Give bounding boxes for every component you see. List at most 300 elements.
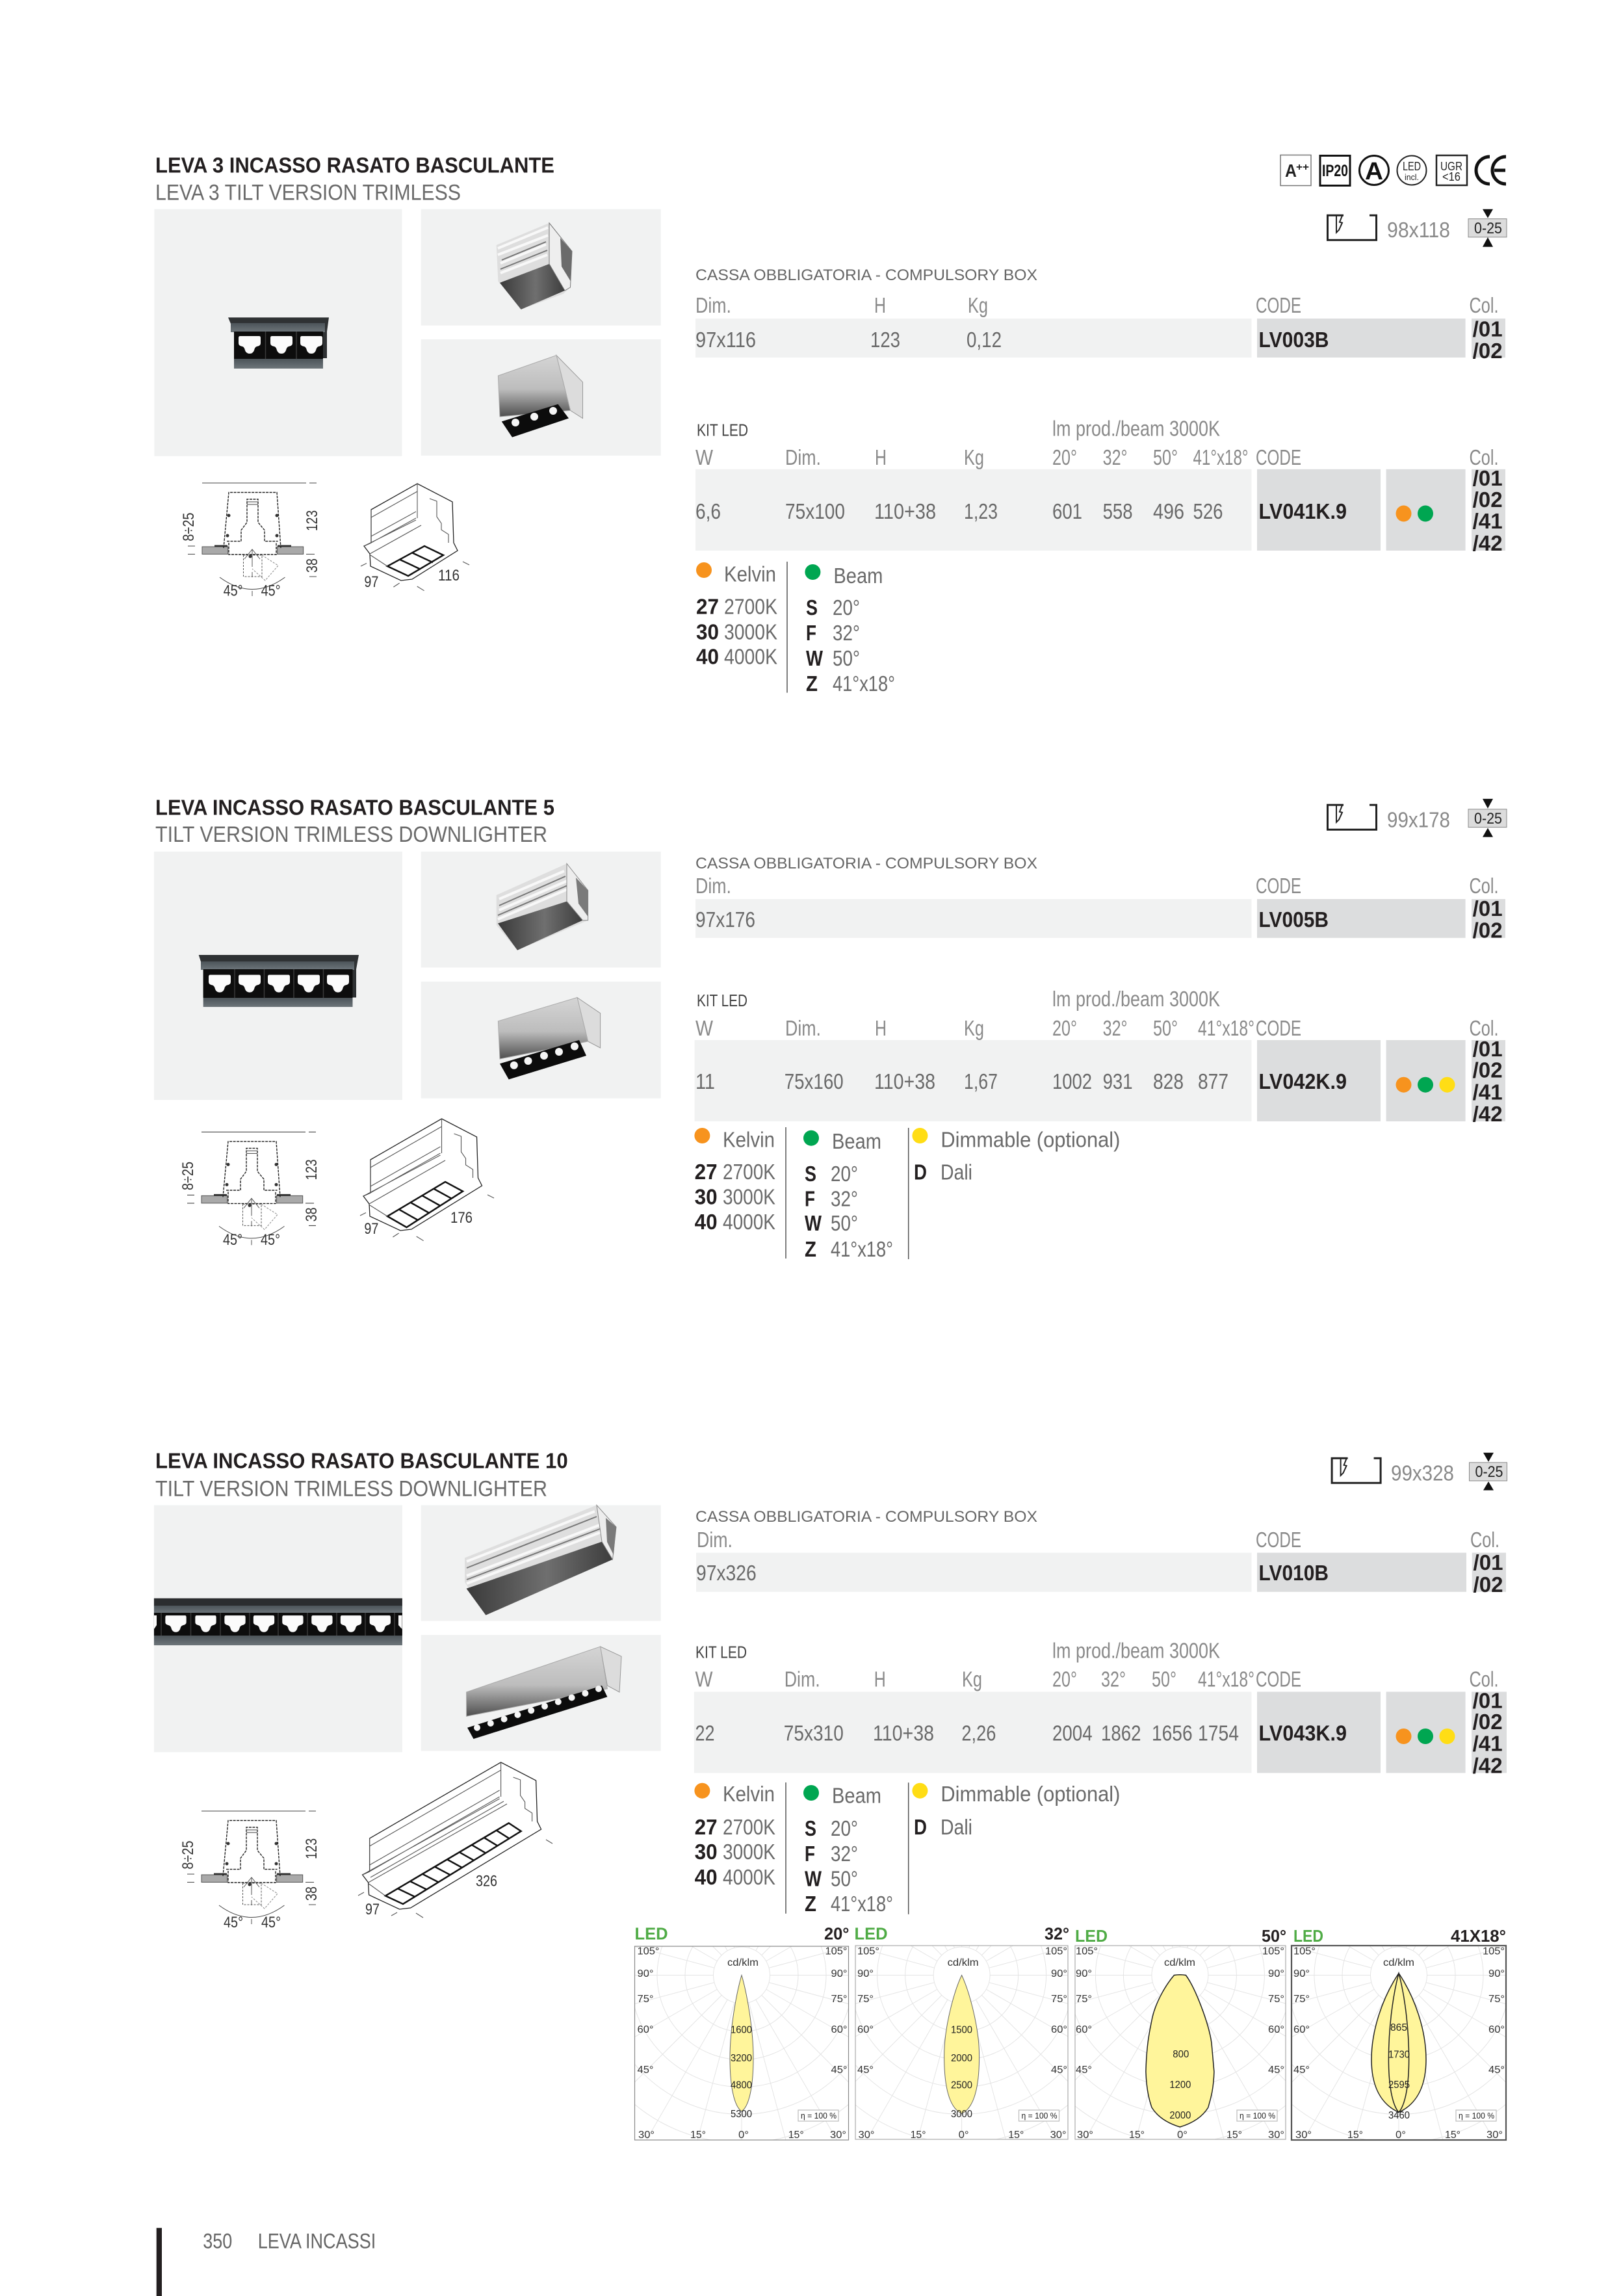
table: compulsory box: 97x176: [695, 907, 755, 932]
polar chart: LED 32°: 60°: [1051, 2024, 1067, 2035]
polar chart: LED 32°: 0°: [959, 2130, 969, 2141]
section drawing: [188, 483, 317, 596]
polar chart: LED 20°: 60°: [831, 2024, 848, 2035]
isometric drawing: [358, 1762, 552, 1918]
polar chart: LED 50°: 105°: [1262, 1946, 1284, 1957]
panel: bottom render: [421, 1635, 661, 1751]
polar chart: LED 32°: 60°: [857, 2024, 874, 2035]
polar chart: LED 32°: 75°: [857, 1994, 874, 2005]
table: compulsory box: Col.: [1469, 874, 1499, 898]
cut-out size: [1332, 1458, 1454, 1485]
table: kit LED: 110+38: [874, 1069, 935, 1093]
table: compulsory box: Col.: [1469, 293, 1499, 317]
polar chart: LED 32°: 32°: [1045, 1924, 1069, 1943]
footer: [157, 2228, 376, 2296]
legend: kelvin, beam, dimmable: Kelvin: [723, 1782, 775, 1806]
polar chart: LED 32°: 2500: [951, 2080, 972, 2091]
polar chart: LED 50°: 15°: [1129, 2130, 1145, 2141]
panel: top render: [421, 209, 661, 326]
polar chart: LED 32°: 15°: [911, 2130, 926, 2141]
table: kit LED: LV043K.9: [1258, 1721, 1347, 1745]
table: kit LED: 601: [1052, 499, 1082, 523]
polar chart: LED 32°: 75°: [1051, 1994, 1067, 2005]
polar chart: LED 20°: 30°: [830, 2130, 846, 2141]
table: kit LED: 50°: [1152, 1667, 1176, 1691]
polar chart: LED 20°: 90°: [637, 1968, 653, 1979]
table: kit LED: LV042K.9: [1258, 1069, 1347, 1093]
section dimensions: 8÷25: [180, 513, 198, 541]
legend: kelvin, beam, dimmable: 2700K: [723, 1815, 775, 1839]
isometric drawing: 97: [365, 1901, 380, 1918]
table: kit LED: 20°: [1052, 1667, 1077, 1691]
table: kit LED: 2004: [1052, 1721, 1093, 1745]
ceiling thickness 0-25: [1468, 799, 1507, 837]
legend: kelvin, beam, dimmable: 30: [695, 1185, 718, 1209]
table: kit LED: 1862: [1101, 1721, 1141, 1745]
section dimensions: [179, 1838, 320, 1931]
section dimensions: 8÷25: [179, 1841, 197, 1870]
cut-out size: 99x178: [1387, 808, 1450, 832]
legend: kelvin, beam, dimmable: 50°: [831, 1867, 858, 1890]
table: kit LED: /42: [1473, 1102, 1503, 1126]
polar chart: LED 41X18°: 15°: [1445, 2130, 1461, 2141]
legend: kelvin, beam, dimmable: 40: [695, 1210, 718, 1234]
panel: front view photo: [154, 209, 402, 456]
polar chart: LED 41X18°: 865: [1390, 2022, 1407, 2033]
table: compulsory box: H: [874, 293, 886, 317]
polar chart: LED 50°: 45°: [1076, 2065, 1092, 2076]
table: kit LED: 828: [1153, 1069, 1184, 1093]
legend: kelvin, beam, dimmable: F: [805, 1187, 815, 1211]
table: kit LED: lm prod./beam 3000K: [1052, 1639, 1220, 1663]
legend: kelvin, beam, dimmable: 50°: [831, 1211, 858, 1235]
cut-out size: 99x328: [1391, 1461, 1454, 1485]
isometric drawing: [360, 1119, 494, 1241]
table: compulsory box: 0,12: [967, 328, 1002, 352]
polar chart: LED 32°: 1500: [951, 2025, 972, 2036]
table: kit LED: Kg: [964, 445, 984, 469]
legend: kelvin, beam, dimmable: W: [805, 1867, 822, 1890]
legend: kelvin and beam: 20°: [833, 595, 860, 620]
polar chart: LED 32°: LED: [854, 1924, 888, 1943]
polar chart: LED 50°: 90°: [1076, 1968, 1092, 1979]
table: kit LED: H: [874, 1667, 886, 1691]
table: compulsory box: CASSA OBBLIGATORIA - COMPULSORY BOX: [695, 855, 1037, 872]
polar chart: LED 20°: 20°: [824, 1924, 849, 1943]
isometric drawing: 97: [364, 1220, 378, 1238]
icon: LED incl.: LED: [1403, 160, 1421, 173]
section 2: LEVA 5: [154, 795, 1507, 1261]
table: kit LED: /01: [1473, 1037, 1503, 1061]
polar chart: LED 41X18°: 90°: [1488, 1968, 1505, 1979]
polar chart: LED 20°: LED: [634, 1924, 668, 1943]
table: kit LED: [694, 1639, 1507, 1777]
section 3: LEVA 10: [154, 1449, 1507, 1931]
table: kit LED: 41°x18°: [1198, 1016, 1254, 1040]
polar chart: LED 20°: 1600: [731, 2025, 752, 2036]
polar chart: LED 20°: 5300: [731, 2109, 752, 2120]
table: kit LED: /02: [1473, 1710, 1503, 1734]
isometric drawing: 116: [438, 567, 460, 584]
legend: kelvin and beam: 50°: [833, 646, 860, 670]
polar chart: LED 20°: 4800: [731, 2080, 752, 2091]
table: compulsory box: 123: [870, 328, 900, 352]
title: LEVA INCASSO RASATO BASCULANTE 5: [155, 795, 554, 819]
polar chart: LED 32°: 30°: [1050, 2130, 1067, 2141]
table: kit LED: 75x100: [785, 499, 845, 523]
legend: kelvin, beam, dimmable: Dimmable (optional): [941, 1128, 1120, 1152]
polar chart: LED 50°: 1200: [1169, 2080, 1191, 2091]
section dimensions: 45°: [261, 1914, 281, 1931]
section drawing: [187, 1132, 316, 1245]
polar chart: LED 50°: 30°: [1268, 2130, 1284, 2141]
section 1: LEVA 3: [154, 153, 1507, 696]
section dimensions: 45°: [261, 1231, 280, 1249]
legend: kelvin, beam, dimmable: Dimmable (optional): [941, 1782, 1120, 1806]
table: kit LED: LV041K.9: [1258, 499, 1347, 523]
table: kit LED: /02: [1473, 1058, 1503, 1082]
table: kit LED: /41: [1473, 509, 1503, 533]
table: kit LED: 50°: [1153, 445, 1178, 469]
table: kit LED: 6,6: [695, 499, 721, 523]
table: kit LED: 41°x18°: [1193, 445, 1248, 469]
isometric drawing: 97: [364, 573, 378, 591]
legend: kelvin, beam, dimmable: Z: [805, 1237, 816, 1261]
page marker bar: [157, 2228, 162, 2296]
legend: kelvin and beam: 30: [696, 620, 719, 644]
polar chart: LED 50°: 90°: [1268, 1968, 1284, 1979]
table: kit LED: /02: [1473, 488, 1503, 512]
polar chart: LED 32°: 15°: [1008, 2130, 1024, 2141]
ceiling thickness 0-25: 0-25: [1475, 1463, 1503, 1481]
table: compulsory box: /02: [1473, 918, 1503, 942]
legend: kelvin, beam, dimmable: S: [805, 1816, 816, 1840]
polar chart: LED 32°: 30°: [858, 2130, 874, 2141]
polar chart: LED 41X18°: 60°: [1488, 2024, 1505, 2035]
table: compulsory box: /01: [1473, 317, 1503, 341]
cut-out size: [1327, 805, 1450, 832]
polar chart: LED 41X18°: 41X18°: [1451, 1926, 1506, 1946]
subtitle: TILT VERSION TRIMLESS DOWNLIGHTER: [155, 1477, 547, 1502]
table: kit LED: 20°: [1052, 1016, 1077, 1040]
table: compulsory box: /01: [1473, 896, 1503, 920]
table: kit LED: 931: [1103, 1069, 1133, 1093]
section name: LEVA INCASSI: [258, 2229, 376, 2252]
polar chart: LED 50°: LED: [1075, 1926, 1108, 1946]
polar chart: LED 20°: η = 100 %: [801, 2111, 837, 2120]
polar chart: LED 20°: 3200: [731, 2053, 752, 2064]
legend: kelvin and beam: 32°: [833, 621, 860, 645]
table: kit LED: W: [695, 1667, 713, 1691]
polar chart: LED 32°: η = 100 %: [1022, 2111, 1057, 2120]
table: kit LED: Dim.: [785, 1016, 821, 1040]
polar chart: LED 41X18°: 105°: [1483, 1946, 1505, 1957]
table: kit LED: 32°: [1103, 1016, 1128, 1040]
legend: kelvin, beam, dimmable: Beam: [832, 1129, 881, 1153]
table: kit LED: W: [695, 1016, 714, 1040]
section dimensions: 45°: [224, 582, 243, 599]
polar chart: LED 50°: 30°: [1077, 2130, 1093, 2141]
legend: kelvin, beam, dimmable: 20°: [831, 1162, 858, 1186]
polar chart: LED 20°: 105°: [637, 1946, 659, 1957]
legend: kelvin, beam, dimmable: W: [805, 1211, 822, 1235]
section dimensions: [179, 1159, 320, 1249]
legend: kelvin and beam: S: [806, 595, 818, 620]
polar chart: LED 41X18°: [1139, 1715, 1623, 2235]
section dimensions: 38: [303, 1886, 320, 1901]
table: kit LED: 50°: [1153, 1016, 1178, 1040]
polar chart: LED 20°: 60°: [637, 2024, 653, 2035]
polar chart: LED 41X18°: 105°: [1293, 1946, 1316, 1957]
isometric drawing: [361, 484, 469, 591]
polar chart: LED 41X18°: 30°: [1295, 2130, 1312, 2141]
table: kit LED: 75x160: [785, 1069, 844, 1093]
polar chart: LED 41X18°: cd/klm: [1383, 1957, 1414, 1968]
polar chart: LED 32°: 2000: [951, 2053, 972, 2064]
table: kit LED: CODE: [1256, 1667, 1301, 1691]
polar chart: LED 41X18°: 75°: [1293, 1994, 1310, 2005]
table: compulsory box: /02: [1473, 339, 1503, 363]
polar chart: LED 50°: 75°: [1268, 1994, 1284, 2005]
table: kit LED: Kg: [962, 1667, 982, 1691]
subtitle: LEVA 3 TILT VERSION TRIMLESS: [155, 181, 461, 205]
polar chart: LED 41X18°: LED: [1293, 1926, 1323, 1946]
polar chart: LED 50°: 45°: [1268, 2065, 1284, 2076]
polar chart: LED 50°: 2000: [1169, 2110, 1191, 2121]
legend: kelvin, beam, dimmable: Z: [805, 1892, 816, 1916]
polar chart: LED 50°: 60°: [1076, 2024, 1092, 2035]
icon: energy class A++: ++: [1296, 162, 1309, 173]
polar chart: LED 50°: 800: [1173, 2049, 1189, 2060]
table: kit LED: Col.: [1469, 1016, 1499, 1040]
table: compulsory box: Col.: [1470, 1528, 1500, 1552]
panel: top render: [421, 852, 661, 967]
legend: kelvin, beam, dimmable: 4000K: [723, 1210, 775, 1234]
table: compulsory box: [695, 855, 1505, 942]
legend: kelvin and beam: Kelvin: [724, 562, 776, 586]
polar chart: LED 50°: 0°: [1177, 2130, 1188, 2141]
polar chart: LED 41X18°: 90°: [1293, 1968, 1310, 1979]
legend: kelvin, beam, dimmable: 4000K: [723, 1865, 775, 1889]
polar chart: LED 41X18°: 15°: [1347, 2130, 1363, 2141]
icon: IP20: [1320, 156, 1350, 186]
table: kit LED: 877: [1198, 1069, 1228, 1093]
table: kit LED: Dim.: [785, 445, 821, 469]
legend: kelvin, beam, dimmable: 3000K: [723, 1185, 775, 1209]
table: compulsory box: CASSA OBBLIGATORIA - COMPULSORY BOX: [695, 1508, 1037, 1526]
polar chart: LED 41X18°: 0°: [1396, 2130, 1406, 2141]
polar chart: LED 32°: 90°: [1051, 1968, 1067, 1979]
panel: top render: [421, 1505, 661, 1621]
section dimensions: [180, 510, 321, 599]
icon: CE mark: [1476, 157, 1506, 184]
legend: kelvin, beam, dimmable: 32°: [831, 1842, 858, 1866]
table: compulsory box: [695, 267, 1505, 363]
icon: UGR<16: <16: [1442, 170, 1461, 183]
title: LEVA 3 INCASSO RASATO BASCULANTE: [155, 153, 554, 177]
polar chart: LED 50°: 75°: [1076, 1994, 1092, 2005]
table: kit LED: CODE: [1256, 1016, 1301, 1040]
panel: front view photo: [154, 852, 402, 1100]
polar chart: LED 32°: 45°: [1051, 2065, 1067, 2076]
legend: kelvin, beam, dimmable: 41°x18°: [831, 1892, 893, 1916]
polar chart: LED 41X18°: 3460: [1388, 2110, 1410, 2121]
polar chart: LED 41X18°: 60°: [1293, 2024, 1310, 2035]
polar chart: LED 20°: 45°: [637, 2065, 653, 2076]
legend: kelvin, beam, dimmable: F: [805, 1842, 815, 1866]
legend: kelvin and beam: F: [806, 621, 816, 645]
cut-out size: [1327, 215, 1450, 242]
legend: kelvin, beam, dimmable: 30: [695, 1840, 718, 1864]
polar chart: LED 32°: 45°: [857, 2065, 874, 2076]
table: kit LED: KIT LED: [695, 1643, 747, 1662]
table: compulsory box: [695, 1508, 1506, 1597]
table: kit LED: [695, 987, 1505, 1126]
icon: energy class A++: [1280, 155, 1311, 186]
legend: kelvin and beam: 4000K: [724, 645, 777, 668]
section dimensions: 123: [303, 1159, 320, 1180]
legend: kelvin, beam, dimmable: 27: [695, 1815, 718, 1839]
table: kit LED: W: [695, 445, 714, 469]
table: kit LED: 1,67: [964, 1069, 998, 1093]
table: kit LED: KIT LED: [697, 421, 748, 440]
section dimensions: 8÷25: [179, 1162, 197, 1190]
legend: kelvin, beam, dimmable: Dali: [941, 1815, 972, 1839]
isometric drawing: 326: [476, 1872, 497, 1890]
icon: UGR<16: UGR: [1440, 160, 1462, 173]
polar chart: LED 41X18°: 2595: [1388, 2080, 1410, 2091]
icon: IP20: IP20: [1322, 162, 1348, 180]
legend: kelvin, beam, dimmable: D: [914, 1815, 927, 1839]
panel: bottom render: [421, 982, 661, 1099]
table: kit LED: 110+38: [873, 1721, 934, 1745]
legend: kelvin and beam: Beam: [833, 564, 883, 588]
table: compulsory box: LV003B: [1258, 328, 1329, 352]
polar chart: LED 20°: 75°: [637, 1994, 653, 2005]
section dimensions: 45°: [224, 1914, 243, 1931]
table: kit LED: /41: [1473, 1732, 1503, 1755]
section dimensions: 123: [303, 1838, 320, 1859]
table: compulsory box: CASSA OBBLIGATORIA - COMPULSORY BOX: [695, 267, 1037, 284]
table: kit LED: /42: [1473, 1753, 1503, 1777]
legend: kelvin and beam: 41°x18°: [833, 672, 895, 696]
polar chart: LED 32°: 3000: [951, 2109, 972, 2120]
legend: kelvin, beam, dimmable: 40: [695, 1865, 718, 1889]
table: kit LED: 1656: [1152, 1721, 1193, 1745]
legend: kelvin, beam, dimmable: S: [805, 1162, 816, 1186]
table: compulsory box: 97x326: [696, 1561, 757, 1585]
table: kit LED: 32°: [1103, 445, 1128, 469]
table: kit LED: lm prod./beam 3000K: [1052, 987, 1220, 1011]
table: compulsory box: CODE: [1256, 293, 1301, 317]
table: kit LED: /42: [1473, 531, 1503, 555]
polar chart: LED 32°: [702, 1715, 1222, 2235]
polar chart: LED 41X18°: 75°: [1488, 1994, 1505, 2005]
polar chart: LED 32°: 90°: [857, 1968, 874, 1979]
table: kit LED: 20°: [1052, 445, 1077, 469]
polar chart: LED 41X18°: 1730: [1388, 2049, 1410, 2061]
title: LEVA INCASSO RASATO BASCULANTE 10: [155, 1449, 568, 1473]
legend: kelvin, beam, dimmable: 20°: [831, 1816, 858, 1840]
polar chart: LED 41X18°: 30°: [1487, 2130, 1503, 2141]
legend: kelvin, beam, dimmable: D: [914, 1160, 927, 1184]
table: kit LED: Kg: [964, 1016, 984, 1040]
table: compulsory box: Kg: [968, 293, 988, 317]
table: kit LED: 1002: [1052, 1069, 1092, 1093]
legend: kelvin and beam: 3000K: [724, 620, 777, 644]
polar chart: LED 50°: η = 100 %: [1240, 2111, 1275, 2120]
polar chart: LED 32°: cd/klm: [948, 1957, 979, 1968]
table: compulsory box: LV005B: [1258, 907, 1329, 932]
legend: kelvin, beam, dimmable: Dali: [941, 1160, 972, 1184]
legend: kelvin, beam, dimmable: Kelvin: [723, 1128, 775, 1152]
legend: kelvin, beam, dimmable: 41°x18°: [831, 1237, 893, 1261]
section dimensions: 45°: [223, 1231, 242, 1249]
polar chart: LED 32°: 105°: [857, 1946, 879, 1957]
section dimensions: 123: [304, 510, 321, 531]
polar chart: LED 32°: 105°: [1045, 1946, 1067, 1957]
legend: kelvin and beam: 40: [696, 645, 719, 668]
legend: kelvin, beam, dimmable: 2700K: [723, 1160, 775, 1184]
polar chart: LED 20°: 45°: [831, 2065, 848, 2076]
ceiling thickness 0-25: [1468, 209, 1507, 247]
polar chart: LED 20°: 15°: [690, 2130, 706, 2141]
table: kit LED: H: [875, 445, 887, 469]
icon: UGR<16: [1436, 155, 1467, 185]
polar chart: LED 20°: 90°: [831, 1968, 848, 1979]
polar chart: LED 50°: [920, 1715, 1440, 2235]
table: compulsory box: CODE: [1256, 1528, 1301, 1552]
table: kit LED: 496: [1153, 499, 1184, 523]
table: kit LED: 32°: [1101, 1667, 1126, 1691]
certification icons: [1280, 155, 1506, 186]
table: kit LED: 22: [695, 1721, 715, 1745]
table: compulsory box: Dim.: [695, 293, 731, 317]
table: compulsory box: 97x116: [695, 328, 756, 352]
section dimensions: 38: [303, 1207, 320, 1221]
ceiling thickness 0-25: 0-25: [1474, 810, 1502, 828]
legend: kelvin, beam, dimmable: [694, 1782, 1120, 1916]
table: kit LED: H: [875, 1016, 887, 1040]
polar chart: LED 20°: 0°: [738, 2130, 749, 2141]
polar chart: LED 50°: cd/klm: [1164, 1957, 1195, 1968]
table: kit LED: Dim.: [785, 1667, 820, 1691]
polar chart: LED 50°: 105°: [1076, 1946, 1098, 1957]
section dimensions: 38: [304, 558, 321, 573]
table: kit LED: 2,26: [961, 1721, 996, 1745]
polar chart: LED 50°: 50°: [1262, 1926, 1286, 1946]
table: compulsory box: Dim.: [695, 874, 731, 898]
table: kit LED: [695, 417, 1505, 555]
legend: kelvin and beam: 27: [696, 594, 719, 619]
table: kit LED: 11: [695, 1069, 715, 1093]
table: compulsory box: LV010B: [1258, 1561, 1329, 1585]
polar chart: LED 41X18°: 45°: [1293, 2065, 1310, 2076]
polar chart: LED 20°: 15°: [788, 2130, 804, 2141]
table: kit LED: KIT LED: [697, 991, 747, 1010]
legend: kelvin, beam, dimmable: 27: [695, 1160, 718, 1184]
table: kit LED: 1,23: [964, 499, 998, 523]
legend: kelvin and beam: [696, 562, 895, 696]
polar chart: LED 20°: cd/klm: [727, 1957, 759, 1968]
table: kit LED: 75x310: [784, 1721, 844, 1745]
cut-out size: 98x118: [1387, 218, 1450, 242]
polar chart: LED 41X18°: η = 100 %: [1459, 2111, 1494, 2120]
icon: energy class A++: A: [1285, 161, 1297, 181]
legend: kelvin and beam: 2700K: [724, 594, 777, 619]
table: kit LED: Col.: [1469, 445, 1499, 469]
ceiling thickness 0-25: [1469, 1453, 1507, 1490]
